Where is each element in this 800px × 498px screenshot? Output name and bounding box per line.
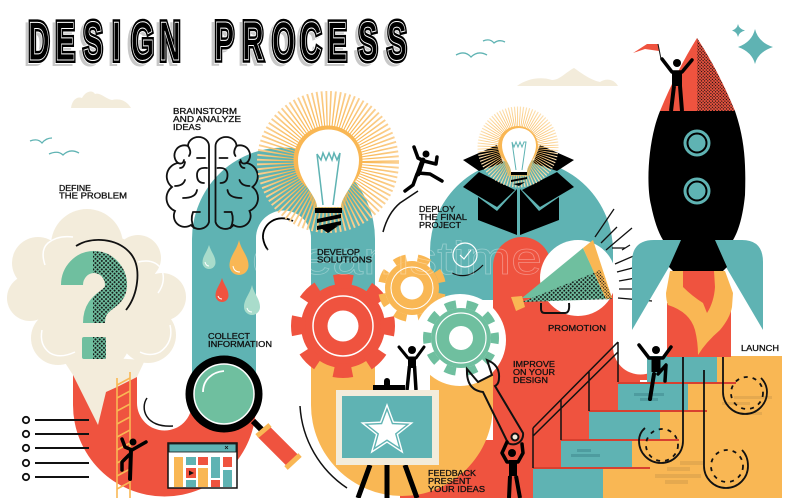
label: launch: LAUNCH — [741, 343, 779, 353]
label: deploy — [419, 204, 467, 230]
path: teal arch behind box — [430, 159, 613, 350]
stairs — [533, 356, 782, 498]
ladder — [117, 372, 130, 498]
label: improve — [513, 359, 555, 385]
label: feedback: FEEDBACK — [428, 468, 476, 478]
label: brainstorm: IDEAS — [173, 122, 201, 132]
figure holding wrench — [502, 442, 523, 498]
railing — [533, 342, 618, 468]
label: promotion: PROMOTION — [548, 323, 606, 333]
label: collect information: COLLECT — [208, 331, 251, 341]
label: feedback — [428, 468, 485, 494]
flag and figure on rocket — [633, 44, 692, 111]
label: improve: ON YOUR — [513, 367, 555, 377]
question mark — [72, 262, 116, 359]
brain — [166, 137, 258, 229]
label: brainstorm: BRAINSTORM — [173, 106, 237, 116]
title: Design Process: DESIGN PROCESS — [28, 11, 407, 72]
clock — [452, 243, 483, 276]
gear: green — [414, 294, 506, 386]
flame — [666, 271, 733, 357]
label: feedback: YOUR IDEAS — [428, 484, 485, 494]
stars — [732, 24, 773, 64]
rocket portholes — [684, 130, 710, 204]
title: Design Process: DESIGN PROCESS — [28, 11, 407, 72]
title: Design Process: DESIGN PROCESS — [28, 11, 407, 72]
label: define the problem: THE PROBLEM — [59, 190, 127, 200]
figure climbing the ladder — [122, 438, 146, 479]
orange arc beside ribbon — [300, 406, 347, 488]
presentation board — [336, 378, 439, 498]
label: brainstorm — [173, 106, 241, 132]
megaphone sound lines — [595, 209, 652, 301]
small arc in arch — [263, 218, 293, 250]
label: deploy: DEPLOY — [419, 204, 455, 214]
figure above the board — [399, 346, 424, 390]
rocket fins — [632, 240, 763, 330]
label: deploy: THE FINAL — [419, 212, 467, 222]
label: collect information: INFORMATION — [208, 339, 272, 349]
watermark: dreamstime — [252, 232, 542, 284]
backdrop circle: promotion — [540, 240, 616, 316]
box — [463, 145, 574, 235]
line under jumping figure — [383, 191, 418, 232]
title: Design Process: DESIGN PROCESS — [25, 14, 404, 75]
label: define the problem — [59, 183, 127, 200]
rocket body — [648, 38, 745, 271]
browser window — [168, 443, 237, 488]
label: improve: DESIGN — [513, 375, 548, 385]
label: deploy: PROJECT — [419, 220, 462, 230]
hooks and dashed circles — [639, 335, 767, 488]
gear: orange — [372, 248, 452, 328]
wrench — [467, 360, 523, 444]
gear: red — [298, 281, 388, 371]
path: red ribbon under cloud — [73, 365, 256, 496]
label: improve: IMPROVE — [513, 359, 555, 369]
main light bulb — [277, 111, 379, 233]
drops — [202, 240, 260, 315]
clouds in the sky — [71, 68, 618, 108]
magnifier — [186, 356, 300, 468]
birds — [30, 40, 505, 155]
label: develop solutions: SOLUTIONS — [317, 254, 372, 264]
label: develop solutions — [317, 247, 372, 264]
megaphone — [511, 240, 612, 313]
path: teal arch behind bulb — [192, 147, 375, 400]
checklist — [23, 417, 89, 480]
label: develop solutions: DEVELOP — [317, 247, 360, 257]
figure climbing the stairs — [639, 345, 671, 399]
small light bulb — [488, 117, 548, 186]
label: collect information — [208, 331, 272, 349]
path: red ribbon under promotion — [400, 237, 731, 498]
jumping figure — [405, 147, 442, 191]
cloud: define the problem — [7, 209, 186, 425]
label: brainstorm: AND ANALYZE — [173, 114, 241, 124]
path: orange ribbon — [311, 350, 493, 496]
hole arc — [144, 398, 173, 426]
label: define the problem: DEFINE — [59, 183, 91, 193]
label: feedback: PRESENT — [428, 476, 472, 486]
